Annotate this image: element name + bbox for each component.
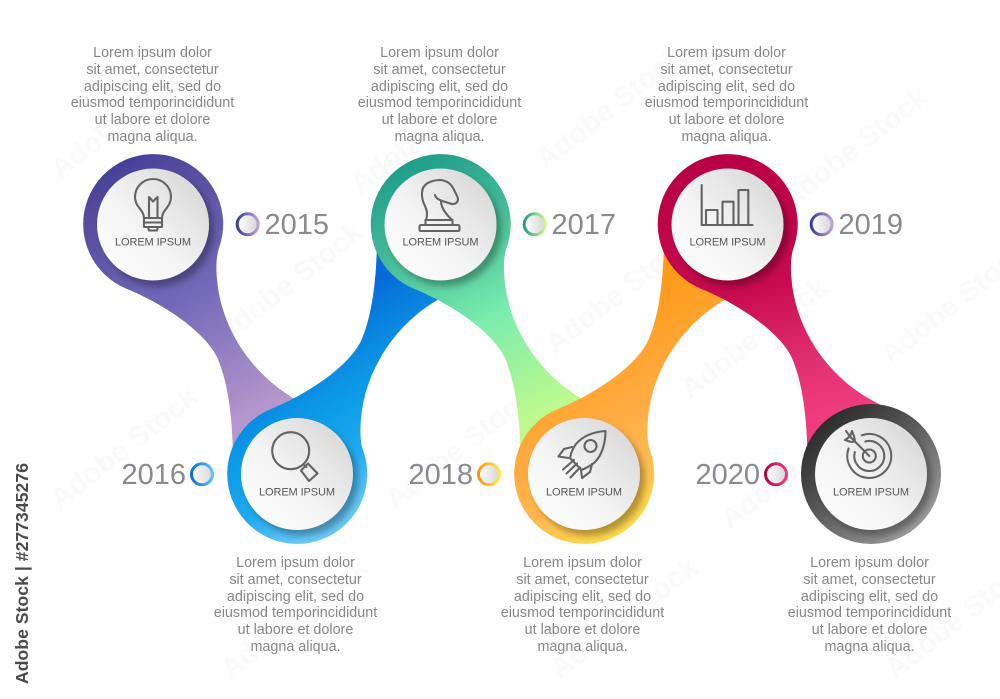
panel: 2019 description (645, 45, 808, 145)
panel: 2017 description: adipiscing elit, sed do (371, 79, 508, 95)
faint stock watermark: Adobe Stock (545, 551, 705, 686)
faint stock watermark: Adobe Stock (540, 226, 700, 361)
panel: 2017 description: ut labore et dolore (382, 112, 497, 128)
panel: orange node 2018 (514, 234, 739, 544)
icon: light bulb (135, 179, 171, 230)
faint stock watermark: Adobe Stock (380, 381, 540, 516)
white disc (528, 418, 640, 530)
year marker 2018: 2018 (408, 459, 473, 491)
panel: 2018 description: ut labore et dolore (525, 622, 640, 638)
panel: 2016 description: ut labore et dolore (238, 622, 353, 638)
year marker 2019: 2019 (838, 209, 903, 241)
faint stock watermark: Adobe Stock (530, 41, 690, 176)
faint stock watermark: Adobe Stock (675, 271, 835, 406)
panel: 2016 description (214, 555, 377, 655)
icon: target (845, 431, 891, 478)
faint stock watermark: Adobe Stock (215, 551, 375, 686)
panel: 2018 description (501, 555, 664, 655)
panel: 2019 description: magna aliqua. (681, 129, 772, 145)
panel: black node 2020 (801, 404, 941, 544)
black ring (801, 404, 941, 544)
panel: 2015 description (71, 45, 234, 145)
panel: 2018 description: eiusmod temporincididunt (501, 605, 664, 621)
panel: 2020 description: magna aliqua. (824, 639, 915, 655)
crimson teardrop (658, 154, 882, 464)
panel: 2018 description: magna aliqua. (537, 639, 628, 655)
panel: 2015 description: magna aliqua. (107, 129, 198, 145)
panel: 2018 description: sit amet, consectetur (516, 572, 649, 588)
panel: 2016 description: eiusmod temporincididunt (214, 605, 377, 621)
faint stock watermark: Adobe Stock (210, 216, 370, 351)
white disc (241, 418, 353, 530)
panel: 2016 description: adipiscing elit, sed do (227, 589, 364, 605)
year marker 2017: 2017 (552, 209, 616, 241)
panel: 2019 description: sit amet, consectetur (660, 62, 793, 78)
white disc (672, 168, 784, 280)
blue teardrop (227, 234, 452, 544)
year marker 2016: 2016 (122, 459, 186, 491)
panel: 2020 description: ut labore et dolore (812, 622, 927, 638)
panel: 2020 description: sit amet, consectetur (803, 572, 936, 588)
panel: blue node 2016 (227, 234, 452, 544)
panel: 2020 description: Lorem ipsum dolor (810, 555, 929, 571)
panel: 2019 description: Lorem ipsum dolor (667, 45, 786, 61)
panel: 2018 description: adipiscing elit, sed do (514, 589, 651, 605)
white disc (97, 168, 209, 280)
panel: 2016 description: sit amet, consectetur (229, 572, 362, 588)
label: LOREM IPSUM (259, 486, 335, 498)
panel: 2015 description: adipiscing elit, sed do (84, 79, 221, 95)
faint stock watermark: Adobe Stock (45, 381, 205, 516)
teal teardrop (371, 154, 596, 464)
year marker 2020: 2020 (696, 459, 760, 491)
panel: 2020 description (788, 555, 951, 655)
panel: 2015 description: sit amet, consectetur (86, 62, 219, 78)
panel: purple node 2015 (83, 154, 308, 464)
panel: 2017 description: Lorem ipsum dolor (380, 45, 499, 61)
panel: 2015 description: eiusmod temporincididunt (71, 95, 234, 111)
panel: 2015 description: Lorem ipsum dolor (93, 45, 212, 61)
panel: 2016 description: magna aliqua. (250, 639, 341, 655)
white disc (815, 418, 927, 530)
faint stock watermark: Adobe Stock (345, 66, 505, 201)
panel: 2018 description: Lorem ipsum dolor (523, 555, 642, 571)
purple teardrop (83, 154, 308, 464)
icon: chess knight (420, 180, 460, 231)
faint stock watermark: Adobe Stock (715, 401, 875, 536)
panel: crimson node 2019 (658, 154, 882, 464)
panel: 2019 description: ut labore et dolore (669, 112, 784, 128)
icon: bar chart (702, 185, 752, 225)
faint stock watermark: Adobe Stock (775, 81, 935, 216)
faint stock watermark: Adobe Stock (45, 51, 205, 186)
panel: 2017 description: sit amet, consectetur (373, 62, 506, 78)
panel: 2019 description: eiusmod temporincididunt (645, 95, 808, 111)
label: LOREM IPSUM (546, 486, 622, 498)
panel: 2017 description (358, 45, 521, 145)
panel: teal node 2017 (371, 154, 596, 464)
icon: rocket (558, 431, 606, 478)
panel: 2016 description: Lorem ipsum dolor (236, 555, 355, 571)
panel: 2017 description: magna aliqua. (394, 129, 485, 145)
white disc (384, 168, 496, 280)
year marker 2015: 2015 (264, 209, 329, 241)
label: LOREM IPSUM (833, 486, 909, 498)
label: LOREM IPSUM (690, 236, 766, 248)
panel: 2015 description: ut labore et dolore (95, 112, 210, 128)
icon: magnifier (272, 432, 318, 481)
label: LOREM IPSUM (115, 236, 191, 248)
panel: 2020 description: eiusmod temporincididunt (788, 605, 951, 621)
side credit text: Adobe Stock | #277345276 (12, 463, 32, 684)
label: LOREM IPSUM (402, 236, 478, 248)
panel: 2020 description: adipiscing elit, sed do (801, 589, 938, 605)
panel: 2017 description: eiusmod temporincididunt (358, 95, 521, 111)
panel: 2019 description: adipiscing elit, sed do (658, 79, 795, 95)
orange teardrop (514, 234, 739, 544)
